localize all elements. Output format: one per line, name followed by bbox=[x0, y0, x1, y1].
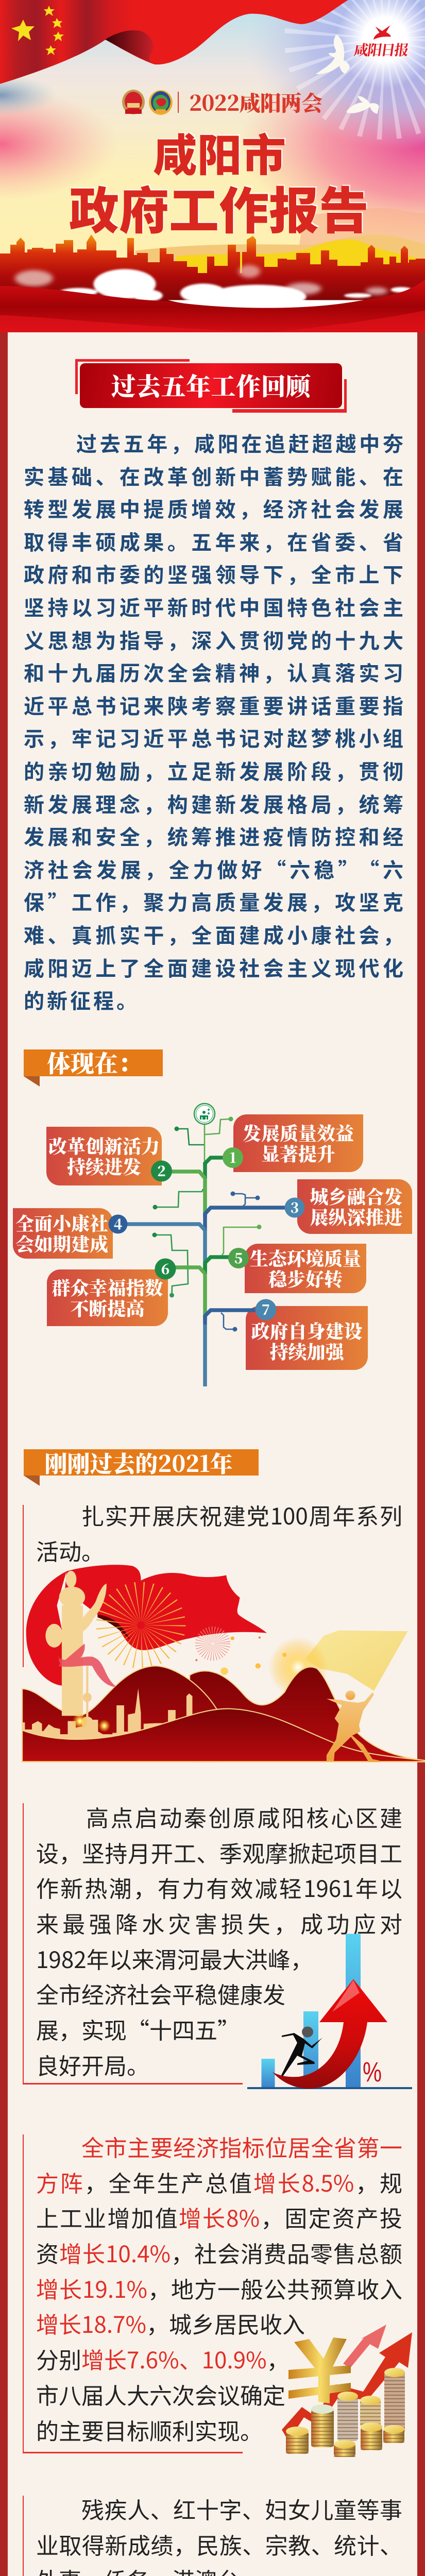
node circles with numbers: 1 bbox=[230, 1147, 236, 1167]
skyline bbox=[0, 234, 425, 319]
distant hills bbox=[135, 208, 425, 283]
tag fold bbox=[24, 1476, 40, 1486]
paragraph: economic indicators: 的主要目标顺利实现。 bbox=[36, 2413, 263, 2446]
red rising arrow bbox=[273, 1979, 387, 2089]
intro text block: 取得丰硕成果。五年来，在省委、省 bbox=[24, 526, 403, 556]
box 4: 全面小康社 bbox=[15, 1210, 108, 1236]
fireworks bbox=[116, 1602, 287, 1675]
title line two: 政府工作报告 bbox=[69, 171, 369, 243]
node circles with numbers: 5 bbox=[234, 1247, 243, 1267]
logo mark bbox=[373, 25, 391, 40]
box 5: 稳步好转 bbox=[268, 1265, 343, 1292]
box 4 bbox=[13, 1208, 113, 1259]
intro text block: 近平总书记来陕考察重要讲话重要指 bbox=[24, 690, 403, 720]
heading: past five years review: 过去五年工作回顾 bbox=[111, 367, 311, 402]
pink ribbon bbox=[58, 1643, 116, 1687]
intro text block: 义思想为指导，深入贯彻党的十九大 bbox=[24, 624, 403, 654]
lower red ribbon bbox=[0, 279, 425, 333]
coin stacks bbox=[286, 2368, 405, 2457]
title line one: 咸阳市 bbox=[153, 120, 286, 184]
paragraph: qinchuangyuan and flood response: 高点启动秦创原咸阳核心区建 bbox=[86, 1800, 402, 1833]
intro text block: 示，牢记习近平总书记对赵梦桃小组 bbox=[24, 722, 403, 752]
paragraph: economic indicators: 增长18.7%，城乡居民收入 bbox=[36, 2307, 305, 2340]
paragraph: economic indicators: 市八届人大六次会议确定 bbox=[36, 2378, 285, 2411]
icon: tree top people badge bbox=[194, 1104, 215, 1124]
paragraph: economic indicators: 全市主要经济指标位居全省第一 bbox=[81, 2130, 402, 2163]
chart baseline bbox=[247, 2087, 412, 2089]
dove one bbox=[316, 35, 350, 74]
flag stars bbox=[11, 6, 64, 55]
intro text block: 转型发展中提质增效，经济社会发展 bbox=[24, 493, 403, 523]
logo text: 咸阳日报 bbox=[353, 39, 410, 60]
rule: paragraph three bbox=[23, 2134, 243, 2453]
glow bbox=[268, 1637, 328, 1698]
illustration: growth bar chart and runner bbox=[247, 1934, 412, 2089]
illustration: yen sign, arrows and coin stacks bbox=[282, 2325, 412, 2457]
box 1: 显著提升 bbox=[261, 1140, 335, 1166]
paragraph: qinchuangyuan and flood response: 设，坚持月开工、季观摩掀起项目工 bbox=[36, 1836, 402, 1869]
box 1: 发展质量效益 bbox=[243, 1120, 354, 1146]
paragraph: party centenary bbox=[36, 1498, 402, 1567]
ribbon fold bbox=[105, 30, 153, 63]
box 6: 不断提高 bbox=[70, 1295, 144, 1321]
box 7: 持续加强 bbox=[269, 1338, 344, 1364]
box 5: 生态环境质量 bbox=[250, 1245, 361, 1271]
small red arrow bbox=[343, 2325, 386, 2368]
dove two bbox=[346, 96, 379, 114]
tag: reflected in: 体现在： bbox=[47, 1045, 142, 1079]
percent sign: % bbox=[363, 2057, 382, 2088]
paragraph: party centenary: 扎实开展庆祝建党100周年系列 bbox=[81, 1498, 402, 1531]
node circles with numbers: 4 bbox=[114, 1213, 122, 1233]
front hill bbox=[22, 1709, 425, 1762]
paragraph: qinchuangyuan and flood response: 展，实现“十四五” bbox=[36, 2012, 240, 2045]
intro text block: 坚持以习近平新时代中国特色社会主 bbox=[24, 591, 403, 621]
branches bbox=[118, 1158, 295, 1320]
intro text block: 发展和安全，统筹推进疫情防控和经 bbox=[24, 821, 403, 851]
paragraph: other undertakings: 业取得新成绩，民族、宗教、统计、 bbox=[36, 2528, 402, 2561]
paragraph: party centenary: 活动。 bbox=[36, 1534, 104, 1567]
node circles with numbers: 3 bbox=[291, 1197, 299, 1217]
rule: paragraph four bbox=[23, 2496, 243, 2576]
rule: paragraph one bbox=[23, 1505, 24, 1667]
paragraph: economic indicators: 增长19.1%，地方一般公共预算收入 bbox=[36, 2272, 402, 2304]
monument pillar bbox=[45, 1571, 107, 1716]
paragraph: other undertakings bbox=[36, 2492, 402, 2576]
icon: CPPCC emblem bbox=[149, 90, 173, 115]
node circles with numbers: 2 bbox=[157, 1160, 166, 1180]
yen sign bbox=[288, 2337, 351, 2403]
box 3: 展纵深推进 bbox=[310, 1204, 403, 1230]
sky background bbox=[0, 0, 425, 332]
red flag swoosh bbox=[26, 1565, 267, 1686]
node circles with numbers: 6 bbox=[161, 1258, 169, 1278]
right page border bbox=[417, 330, 425, 2576]
intro text block: 的新征程。 bbox=[24, 985, 140, 1014]
intro text block: 难、真抓实干，全面建成小康社会， bbox=[24, 919, 403, 949]
divider bbox=[178, 92, 179, 113]
heading: past five years review bbox=[75, 359, 347, 413]
intro text block: 政府和市委的坚强领导下，全市上下 bbox=[24, 558, 403, 588]
tag fold bbox=[24, 1076, 40, 1087]
box 6: 群众幸福指数 bbox=[52, 1274, 163, 1300]
subtitle: 2022 session: 2022咸阳两会 bbox=[189, 87, 323, 117]
sunburst bbox=[333, 0, 425, 91]
skyline city bbox=[22, 1666, 192, 1744]
paragraph: qinchuangyuan and flood response: 全市经济社会平稳健康发 bbox=[36, 1977, 285, 2010]
icon: national emblem bbox=[122, 90, 145, 114]
box 2: 改革创新活力 bbox=[48, 1132, 160, 1159]
paragraph: qinchuangyuan and flood response: 良好开局。 bbox=[36, 2048, 149, 2081]
rule: paragraph two bbox=[23, 1803, 243, 2084]
intro text block: 实基础、在改革创新中蓄势赋能、在 bbox=[24, 461, 403, 490]
paragraph: economic indicators bbox=[36, 2130, 402, 2446]
header banner bbox=[0, 0, 425, 332]
paragraph: economic indicators: 分别增长7.6%、10.9%， bbox=[36, 2342, 290, 2375]
golden flag bbox=[305, 1631, 408, 1691]
paragraph: economic indicators: 上工业增加值增长8%，固定资产投 bbox=[36, 2200, 402, 2233]
intro text block: 过去五年，咸阳在追赶超越中夯 bbox=[76, 428, 403, 457]
big red arrow bbox=[282, 2332, 412, 2441]
soldier silhouette bbox=[327, 1690, 379, 1762]
box 2 bbox=[46, 1127, 162, 1185]
node circles with numbers: 7 bbox=[262, 1299, 270, 1319]
paragraph: economic indicators: 资增长10.4%，社会消费品零售总额 bbox=[36, 2236, 402, 2269]
box 7 bbox=[246, 1306, 368, 1370]
intro text block: 的亲切勉励，立足新发展阶段，贯彻 bbox=[24, 755, 403, 785]
tag: reflected in bbox=[24, 1049, 163, 1076]
box 3: 城乡融合发 bbox=[310, 1183, 403, 1209]
paragraph: qinchuangyuan and flood response: 来最强降水灾害损失，成功应对 bbox=[36, 1906, 402, 1939]
panel: seven-branch tree diagram bbox=[13, 1103, 412, 1386]
box 4: 会如期建成 bbox=[15, 1230, 108, 1257]
clouds bbox=[15, 265, 412, 309]
paragraph: qinchuangyuan and flood response: 1982年以来渭河最大洪峰， bbox=[36, 1942, 313, 1975]
intro text block: 保”工作，聚力高质量发展，攻坚克 bbox=[24, 886, 403, 916]
intro text block: 咸阳迈上了全面建设社会主义现代化 bbox=[24, 952, 403, 982]
intro text block: 新发展理念，构建新发展格局，统筹 bbox=[24, 788, 403, 818]
box 6 bbox=[47, 1269, 168, 1326]
red flag ribbon bbox=[0, 0, 348, 84]
heart bbox=[286, 2571, 386, 2576]
tag: the year 2021 bbox=[24, 1449, 259, 1476]
intro text block bbox=[24, 428, 403, 1014]
intro text block: 济社会发展，全力做好“六稳”“六 bbox=[24, 854, 403, 884]
paragraph: other undertakings: 残疾人、红十字、妇女儿童等事 bbox=[81, 2492, 402, 2525]
box 1 bbox=[233, 1114, 363, 1172]
paragraph: qinchuangyuan and flood response: 作新热潮，有力有效减轻1961年以 bbox=[36, 1871, 402, 1904]
bars bbox=[262, 1934, 361, 2088]
back hills bbox=[22, 1666, 425, 1762]
thin wires bbox=[152, 1117, 262, 1331]
illustration: monument, flags and hills bbox=[22, 1565, 425, 1762]
left page border bbox=[0, 330, 8, 2576]
box 7: 政府自身建设 bbox=[251, 1317, 363, 1344]
intro text block: 和十九届历次全会精神，认真落实习 bbox=[24, 657, 403, 687]
box 3 bbox=[297, 1179, 412, 1234]
box 5 bbox=[245, 1244, 366, 1293]
node circles with numbers bbox=[108, 1147, 305, 1320]
ground line bbox=[22, 1761, 425, 1762]
runner figure bbox=[281, 2027, 322, 2076]
tag: the year 2021: 刚刚过去的2021年 bbox=[44, 1446, 233, 1479]
box 2: 持续进发 bbox=[67, 1153, 141, 1179]
paragraph: qinchuangyuan and flood response bbox=[36, 1800, 402, 2081]
paragraph: economic indicators: 方阵，全年生产总值增长8.5%，规 bbox=[36, 2165, 402, 2198]
tree trunk bbox=[203, 1162, 207, 1386]
